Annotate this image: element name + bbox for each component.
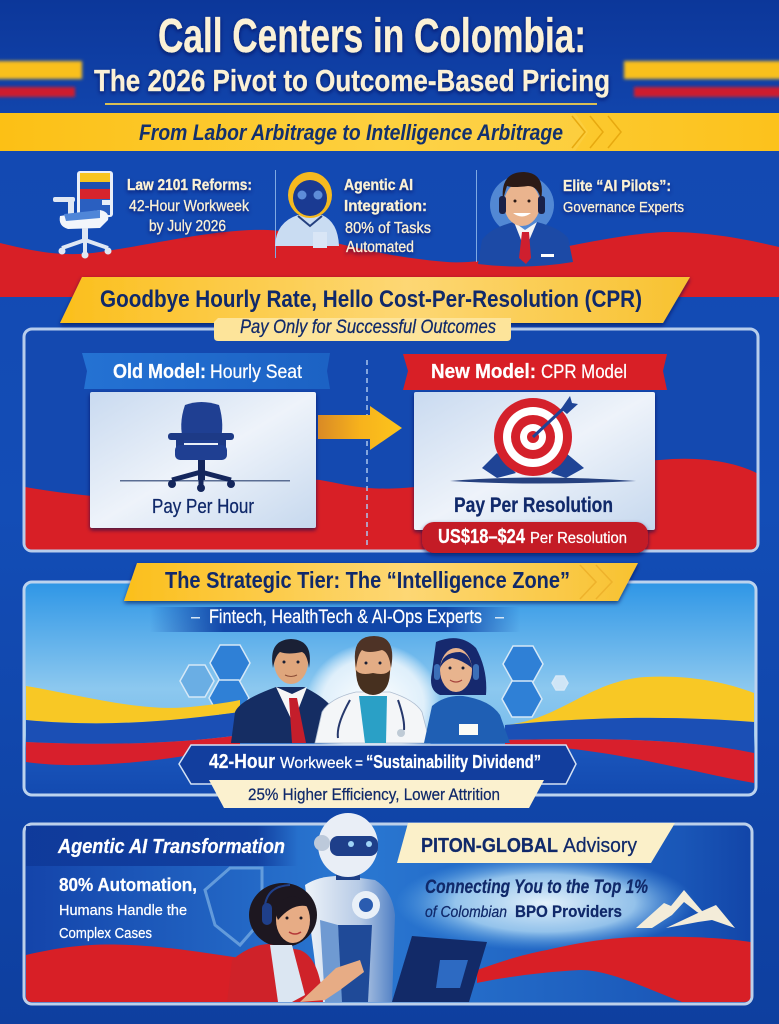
dome glow [305,643,441,767]
title stripes [0,61,779,97]
agentic integration text: 80% of Tasks [345,220,431,237]
advisory text: Connecting You to the Top 1% [425,877,648,898]
subtitle band: From Labor Arbitrage to Intelligence Arbitrage [139,120,563,145]
heading: strategic tier [124,563,638,601]
heading: cost per resolution [60,277,690,323]
law reforms text: Law 2101 Reforms: [127,177,252,194]
person: doctor [315,636,430,743]
advisory banner: PITON-GLOBAL [421,835,558,857]
title: The 2026 Pivot to Outcome-Based Pricing [94,63,610,98]
heading: cost per resolution: Goodbye Hourly Rate, Hello Cost-Per-Resolution (CPR) [100,286,642,313]
red waves [26,937,750,1002]
old model banner: Old Model: [113,361,206,383]
old model banner [82,353,330,389]
icon: navy office chair [120,402,290,492]
price pill: US$18–$24 [438,526,526,548]
automation text: 80% Automation, [59,875,197,895]
workweek ribbon: 42-Hour [209,751,275,773]
elite pilots text: Elite “AI Pilots”: [563,178,671,195]
decorative hexagon network [205,868,262,945]
icon: office chair with flag [53,171,113,258]
icon: mountains [636,890,735,928]
fintech subheading: Fintech, HealthTech & AI-Ops Experts [209,607,482,628]
icon: AI robot [275,172,339,248]
fintech subheading [150,607,520,632]
workweek ribbon: Workweek [280,755,353,772]
agent woman [227,883,364,1002]
agentic title bar: Agentic AI Transformation [57,836,285,858]
law reforms text: by July 2026 [149,218,226,235]
automation text: Humans Handle the [59,902,187,919]
arrow [318,406,402,450]
efficiency tab [209,780,544,808]
automation text: Complex Cases [59,925,152,942]
panel: intelligence zone [24,582,756,808]
title: Call Centers in Colombia: [158,10,586,63]
agentic integration text [344,177,431,256]
price pill: Per Resolution [530,530,627,547]
workweek ribbon [179,745,576,784]
advisory text [425,877,648,921]
flag waves [26,677,754,783]
advisory banner: Advisory [563,835,637,857]
old model card [90,392,316,528]
heading: strategic tier: The Strategic Tier: The “Intelligence Zone” [165,567,570,593]
icon: AI pilot person [478,172,573,267]
tab: pay only for outcomes: Pay Only for Successful Outcomes [240,317,496,338]
price pill [422,522,648,553]
dashed divider [366,360,368,549]
laptop screen icon [436,960,468,988]
pay per resolution label: Pay Per Resolution [454,494,613,517]
advisory text: of Colombian [425,904,507,921]
red wave in pricing panel [26,459,756,550]
person: agent with headset [424,638,510,743]
agentic integration text: Integration: [344,198,427,215]
elite pilots text: Governance Experts [563,199,684,216]
laptop [392,936,487,1002]
hexagons [180,645,568,717]
law reforms text [127,177,252,235]
automation text [59,875,197,942]
advisory glow [395,855,695,951]
robot [305,813,395,1002]
title [94,10,610,98]
agentic integration text: Agentic AI [344,177,413,194]
efficiency tab: 25% Higher Efficiency, Lower Attrition [248,785,500,804]
subtitle band [0,113,779,151]
person: businessman [231,639,330,743]
new model card [414,392,655,530]
new model banner: New Model: [431,361,536,383]
pay per hour label: Pay Per Hour [152,496,254,518]
law reforms text: 42-Hour Workweek [129,198,250,215]
red wave [0,230,779,297]
icon: target with arrow [450,396,636,484]
new model banner [403,354,667,390]
panel: pricing model comparison [24,329,758,553]
advisory banner [397,823,675,863]
advisory text: BPO Providers [515,902,622,921]
dividers [275,170,477,262]
workweek ribbon: = [355,755,363,772]
new model banner: CPR Model [541,362,627,383]
agentic title bar [26,826,298,866]
panel: agentic transformation and advisory [24,813,752,1004]
elite pilots text [563,178,684,216]
agentic integration text: Automated [346,239,414,256]
old model banner: Hourly Seat [210,362,303,383]
workweek ribbon: “Sustainability Dividend” [366,752,541,772]
